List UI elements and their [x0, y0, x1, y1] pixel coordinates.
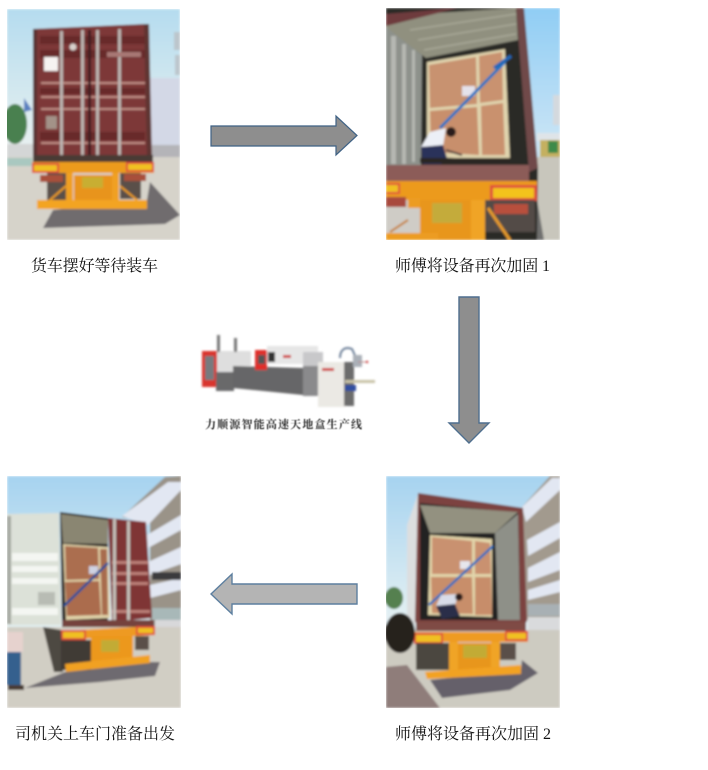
arrow: right [211, 116, 357, 155]
photo: technician reinforcing equipment 2 [385, 476, 560, 708]
caption: truck waiting: 货车摆好等待装车 [31, 257, 158, 275]
photo: technician reinforcing equipment 1 [386, 8, 560, 240]
arrow: down [449, 297, 489, 443]
photo: truck waiting to load [3, 9, 180, 240]
arrow: left [211, 574, 357, 614]
photo: driver closing doors [7, 476, 181, 708]
product label: 力顺源智能高速天地盒生产线 [205, 417, 362, 431]
caption: reinforcing 1: 师傅将设备再次加固 1 [395, 257, 550, 275]
caption: driver closes door: 司机关上车门准备出发 [15, 725, 175, 743]
product image: box production line [202, 335, 375, 431]
caption: reinforcing 2: 师傅将设备再次加固 2 [395, 725, 551, 743]
